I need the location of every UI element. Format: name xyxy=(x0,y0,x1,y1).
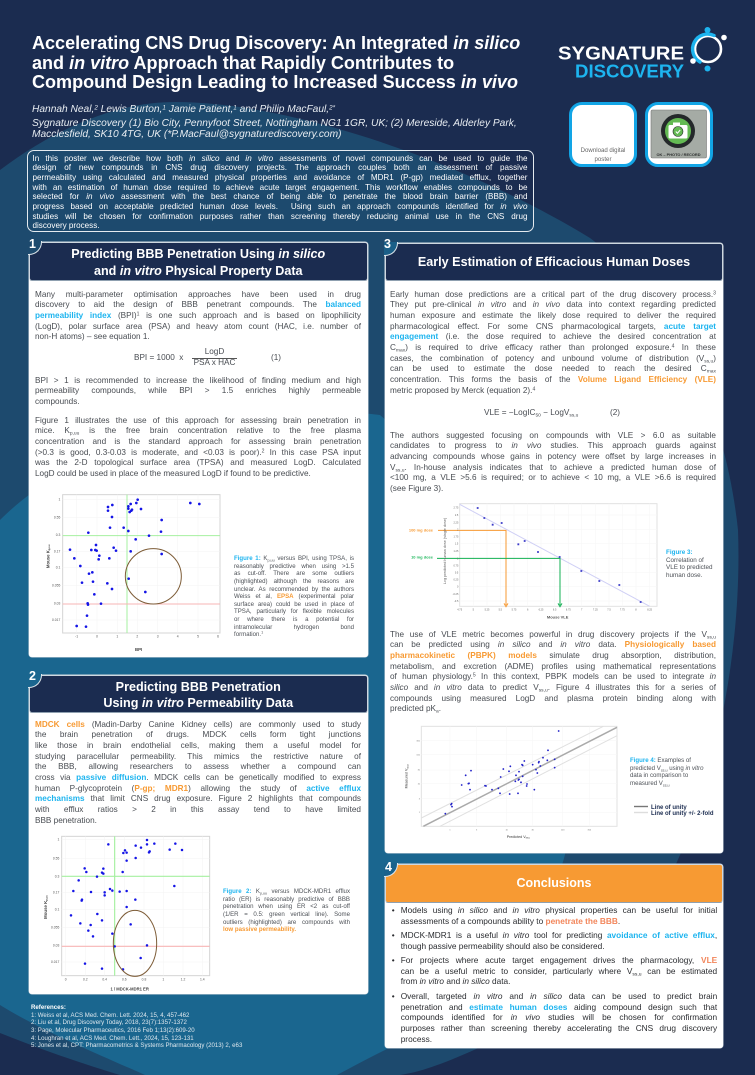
references: 4: Loughran et al, ACS Med. Chem. Lett., 2024, 15, 123-131 xyxy=(31,1035,194,1042)
chart: Figure 3 VLE correlation: 0.75 xyxy=(454,564,459,567)
chart: Figure 2 scatter: 0 xyxy=(65,978,67,982)
text: early human dose predictions: Cmax) is required to drive efficacy rather than prolonged exposure.4 In these xyxy=(390,343,716,353)
chart: Figure 2 scatter: 0.055 xyxy=(51,926,59,930)
chart: Figure 2 scatter: 0.017 xyxy=(51,960,59,964)
text: BPI introduction: non-H atoms) – see equation 1. xyxy=(35,332,150,341)
heading 1: and in vitro Physical Property Data xyxy=(94,264,303,278)
references xyxy=(31,1004,242,1049)
legend: lines of unity: Line of unity xyxy=(651,805,687,811)
abstract box: selected for in vivo assessment with the best chance of being able to penetrate the blood brain barrier (BBB) and xyxy=(32,192,528,201)
chart: Figure 3 VLE correlation: 0.25 xyxy=(454,579,459,582)
abstract box: with an estimation of human dose required to achieve acute target engagement. This workflow enables compounds to be xyxy=(32,183,528,192)
text: MDCK cells: cross via passive diffusion. MDCK cells can be genetically modified to express xyxy=(35,773,361,782)
chart: Figure 3 VLE correlation: 0 xyxy=(457,586,459,589)
text: Figure 1 explanation: concentration and is the standard approach for assessing brain penetration xyxy=(35,437,361,446)
caption: Figure 3: Figure 3: xyxy=(666,549,693,556)
chart: Figure 3 VLE correlation: 8 xyxy=(636,608,638,611)
equation 2: (2) xyxy=(610,408,620,417)
caption: Figure 2: ratio (ER) is reasonably predictive of BBB xyxy=(223,896,350,903)
abstract box: progress based on acceptable predicted human dose levels. Using such an approach compounds identified for in vivo xyxy=(32,202,527,211)
button: download digital poster: Download digital xyxy=(581,147,625,154)
chart: Figure 3 VLE correlation: 6.75 xyxy=(566,608,572,611)
text: early human dose predictions: concentration. This forms the basis of the Volume Ligand Efficiency (VLE) xyxy=(390,375,716,384)
heading 2: Predicting BBB Penetration xyxy=(116,680,281,694)
section tab 4 xyxy=(384,863,398,877)
references: References: xyxy=(31,1004,66,1011)
logo: Sygnature Discovery: SYGNATURE xyxy=(558,44,684,64)
text: early human dose predictions: Early human dose predictions are a critical part of the drug discovery process.3 xyxy=(390,290,716,299)
section number 2: 2 xyxy=(29,668,36,682)
chart: Figure 4 predicted vs measured: ss,u xyxy=(526,838,531,840)
text: early human dose predictions: pharmacological effect. For some CNS pharmacological targets, acute target xyxy=(390,322,716,331)
caption: Figure 4: measured Vss,u xyxy=(630,780,670,787)
text: Figure 1 explanation: (>0.3 is good, 0.3-0.03 is moderate, and <0.03 is poor).2 In this case PSA input xyxy=(35,448,361,457)
conclusion 3: can be a useful metric to consider, particularly where Vss,u can be estimated xyxy=(401,966,717,977)
heading 2 xyxy=(29,675,368,713)
chart: Figure 3 VLE correlation: 1.25 xyxy=(454,550,459,553)
text: VLE prediction and PBPK: silico and in vitro data to predict Vss,u. Figure 4 illustrates this for a series of xyxy=(390,683,716,693)
text: BPI thresholds xyxy=(35,376,361,406)
chart: Figure 2 scatter: 0.3 xyxy=(55,875,59,879)
conclusion 2: though passive permeability should also be considered. xyxy=(401,941,605,951)
panel 2: BBB permeability data xyxy=(29,675,368,994)
equation 1: PSA x HAC xyxy=(194,358,235,367)
chart: Figure 1 scatter: 1 xyxy=(117,634,119,638)
caption: Figure 1: as cut-off. There are some outliers xyxy=(234,570,354,577)
text: early human dose predictions: cases, the combination of potency and unbound volume of distribution (Vss,u) xyxy=(390,354,716,364)
references: 5: Jones et al, CPT: Pharmacometrics & Systems Pharmacology (2013) 2, e63 xyxy=(31,1042,242,1049)
chart: Figure 1 scatter: 0.17 xyxy=(54,549,61,553)
caption: Figure 3: Correlation of xyxy=(666,557,704,564)
chart: Figure 2 scatter: 1 / MDCK-MDR1 ER xyxy=(110,987,149,992)
conclusion 4: process. xyxy=(401,1034,432,1044)
text: VLE suitability: (see Figure 3). xyxy=(390,484,443,493)
title xyxy=(32,33,520,92)
chart: Figure 3 VLE correlation: -0.25 xyxy=(453,593,459,596)
chart: Figure 3 VLE correlation: 7 xyxy=(581,608,583,611)
affiliations: Macclesfield, SK10 4TG, UK (*P.MacFaul@sygnaturediscovery.com) xyxy=(32,129,341,140)
references: 3: Page, Molecular Pharmaceutics, 2016 Feb 1;13(2):609-20 xyxy=(31,1027,195,1034)
chart: Figure 2 scatter: 1 xyxy=(162,978,164,982)
title: Accelerating CNS Drug Discovery: An Integrated in silico xyxy=(32,33,520,53)
abstract box xyxy=(26,150,534,232)
equation 1: (1) xyxy=(271,353,281,362)
chart: Figure 4 predicted vs measured: 300 xyxy=(588,830,592,832)
text: MDCK cells: the BBB, allowing researchers to assess whether a compound can xyxy=(35,762,361,771)
text: VLE prediction and PBPK: The use of VLE metric becomes powerful in drug discovery projects if the Vss,u xyxy=(390,630,716,640)
legend: lines of unity: Line of unity +/- 2-fold xyxy=(651,811,714,817)
chart: Figure 1 scatter: 0 xyxy=(96,634,98,638)
chart: Figure 2 scatter: Mouse K xyxy=(43,901,48,919)
text: BPI thresholds: BPI > 1 is recommended to increase the likelihood of finding medium and high xyxy=(35,376,361,385)
chart: Figure 1 scatter: 1 xyxy=(59,497,61,501)
chart: Figure 3 VLE correlation: -0.5 xyxy=(454,600,459,603)
chart: Figure 1 scatter: 3 xyxy=(157,634,159,638)
caption: Figure 1 xyxy=(234,555,354,638)
abstract box: design of new compounds in CNS drug discovery projects. The approach couples both an assessment of passive xyxy=(32,163,528,172)
conclusion 1: assessments of a compounds ability to penetrate the BBB. xyxy=(401,916,620,926)
button: download digital poster: poster xyxy=(595,156,611,163)
logo: Sygnature Discovery xyxy=(558,27,727,82)
chart: Figure 3 VLE correlation: 6 xyxy=(527,608,529,611)
chart: Figure 3 VLE correlation: 4.75 xyxy=(458,608,463,611)
chart: Figure 4 predicted vs measured: 3 xyxy=(419,799,421,801)
chart: Figure 3 VLE correlation: 5 xyxy=(473,608,475,611)
chart: Figure 2 scatter: 1.2 xyxy=(181,978,185,982)
text: Figure 1 explanation: Figure 1 illustrates the use of this approach for assessing brain penetration in xyxy=(35,416,361,425)
conclusion 4 xyxy=(392,991,718,1044)
panel 4: conclusions xyxy=(385,864,723,1048)
chart: Figure 3 VLE correlation: 5.25 xyxy=(485,608,490,611)
text: early human dose predictions: engagement (i.e. the dose required to achieve the desired concentration at xyxy=(390,332,716,341)
equation 2: VLE = −LogIC50 − LogVss,u xyxy=(484,408,578,418)
section number 1: 1 xyxy=(29,237,36,251)
chart: Figure 1 scatter: 6 xyxy=(217,634,219,638)
caption: Figure 2 xyxy=(223,888,350,933)
text: VLE suitability: Vss,u. In-house analysis indicates that to achieve a predicted human dose of xyxy=(390,463,716,473)
text: early human dose predictions: They put pre-clinical in vitro and in vivo data into context regarding predicted xyxy=(390,300,716,309)
text: MDCK cells: the brain penetration of drugs. MDCK cells form tight junctions xyxy=(35,730,361,739)
caption: Figure 4: predicted Vss,u using in vitro xyxy=(630,765,703,772)
chart: Figure 3 VLE correlation: 8.25 xyxy=(648,608,653,611)
chart: Figure 3 VLE correlation: 100 mg dose xyxy=(409,528,434,533)
abstract box: In this poster we describe how both in silico and in vitro assessments of novel compounds can be used to guide the xyxy=(32,154,528,162)
chart: Figure 4 predicted vs measured: 100 xyxy=(561,830,565,832)
heading 4 xyxy=(385,864,723,903)
text: early human dose predictions xyxy=(390,290,716,394)
caption: Figure 1: or where there is a potential for xyxy=(234,616,354,623)
caption: Figure 1: Figure 1: Kp,uu versus BPI, using TPSA, is xyxy=(234,555,354,562)
affiliations: Sygnature Discovery (1) Bio City, Pennyfoot Street, Nottingham NG1 1GR, UK; (2) Mereside, Alderley Park, xyxy=(32,118,517,129)
panel 4: conclusions: • xyxy=(392,930,395,940)
text: VLE suitability xyxy=(390,431,716,493)
chart: Figure 1 scatter: 4 xyxy=(177,634,179,638)
chart: Figure 2 scatter: 0.55 xyxy=(53,857,59,861)
heading 3: Early Estimation of Efficacious Human Doses xyxy=(418,255,690,269)
chart: Figure 1 scatter: 0.55 xyxy=(54,515,61,519)
heading 1: Predicting BBB Penetration Using in silico xyxy=(71,247,325,261)
chart: Figure 2 scatter: 0.2 xyxy=(83,978,88,982)
chart: Figure 3 VLE correlation: 5.75 xyxy=(512,608,517,611)
text: VLE prediction and PBPK: metabolism, and excretion (ADME) profiles using mathematical representations xyxy=(390,662,716,671)
caption: Figure 3: VLE to predicted xyxy=(666,564,713,571)
chart: Figure 3 VLE correlation: 5.5 xyxy=(499,608,503,611)
text: early human dose predictions: metric proposed by Merck (equation 2).4 xyxy=(390,386,535,394)
conclusion 4: compounds identified for in vivo studies will be chosen for confirmation xyxy=(401,1012,717,1022)
caption: Figure 4: Figure 4: Examples of xyxy=(630,757,691,764)
title: Compound Design Leading to Increased Success in vivo xyxy=(32,72,518,92)
chart: Figure 4 predicted vs measured: Predicted V xyxy=(507,835,526,839)
chart: Figure 1 scatter: 0.017 xyxy=(52,618,61,622)
chart: Figure 4 predicted vs measured: 1 xyxy=(449,830,451,832)
text: early human dose predictions: can be used to estimate the dose needed to reach the desired Cmax xyxy=(390,364,716,375)
chart: Figure 1 scatter: 2 xyxy=(137,634,139,638)
chart: Figure 4 predicted vs measured: 100 xyxy=(416,755,421,757)
button: photo / record permitted xyxy=(645,102,713,167)
text: BPI introduction xyxy=(35,290,362,341)
abstract box: studies will be chosen for confirmation purposes rather than screening thereby reducing animal use in the CNS drug xyxy=(32,212,528,221)
chart: Figure 4 predicted vs measured: 1 xyxy=(419,812,421,814)
chart: Figure 3 VLE correlation: Mouse VLE xyxy=(547,615,569,620)
text: Figure 1 explanation xyxy=(35,416,362,478)
conclusion 1: Models using in silico and in vitro physical properties can be useful for initial xyxy=(401,905,717,915)
chart: Figure 3 VLE correlation: 1.5 xyxy=(455,543,459,546)
text: Figure 1 explanation: mice. Kp,uu is the free brain concentration relative to the free plasma xyxy=(35,426,361,437)
text: Figure 1 explanation: was the 2-D topological surface area (TPSA) and measured LogD. Calculated xyxy=(35,458,361,467)
chart: Figure 3 VLE correlation: 2 xyxy=(457,528,459,531)
affiliations xyxy=(32,118,517,140)
button: photo / record permitted: OK – PHOTO / RECORD xyxy=(656,152,701,157)
text: VLE suitability: candidates to progress to in vivo studies. This approach guards against xyxy=(390,441,716,450)
text: MDCK cells: mechanisms that limit CNS drug exposure. Figure 2 highlights that compounds xyxy=(35,794,361,803)
caption: Figure 1: Weiss et al, EPSA (experimental polar xyxy=(234,593,354,600)
text: VLE prediction and PBPK: compounds using measured LogD and plasma protein binding along with xyxy=(390,694,716,703)
equation 1 xyxy=(134,347,281,367)
panel 3: human doses xyxy=(385,243,723,853)
chart: Figure 3 VLE correlation: 1.75 xyxy=(454,536,459,539)
text: BPI introduction: (LogD), polar surface area (PSA) and heavy atom count (HAC, i.e. number of xyxy=(35,322,361,331)
chart: Figure 4 predicted vs measured xyxy=(405,726,618,840)
chart: Figure 4 predicted vs measured: 3 xyxy=(476,830,478,832)
equation 1: LogD xyxy=(205,347,224,356)
chart: Figure 3 VLE correlation: 10 mg dose xyxy=(411,554,434,559)
logo: Sygnature Discovery: DISCOVERY xyxy=(575,62,684,82)
caption: Figure 2: low passive permeability. xyxy=(223,926,296,933)
caption: Figure 2: Figure 2: Kp,uu versus MDCK-MDR1 efflux xyxy=(223,888,350,896)
chart: Figure 2 scatter: p,uu xyxy=(46,895,49,901)
chart: Figure 1 scatter: 0.055 xyxy=(52,583,61,587)
caption: Figure 1: TPSA, particularly for flexible molecules xyxy=(234,608,354,615)
chart: Figure 3 VLE correlation: 2.75 xyxy=(454,507,459,510)
text: early human dose predictions: human exposure and estimate the likely dose required to deliver the required xyxy=(390,311,716,320)
caption: Figure 1: formation.1 xyxy=(234,631,263,638)
panel 1: BBB physical property data xyxy=(29,242,368,657)
heading 1 xyxy=(29,242,368,281)
chart: Figure 4 predicted vs measured: 10 xyxy=(505,830,509,832)
panel 4: conclusions: • xyxy=(392,905,395,915)
caption: Figure 4 xyxy=(630,757,704,787)
chart: Figure 2 scatter xyxy=(43,836,210,992)
chart: Figure 4 predicted vs measured: 300 xyxy=(416,741,421,743)
caption: Figure 2: (1/ER = 0.5: green vertical line). Some xyxy=(223,911,350,918)
chart: Figure 3 VLE correlation: 0.5 xyxy=(455,571,459,574)
text: Figure 1 explanation: LogD could be used in place of the measured LogD if found to be predictive. xyxy=(35,469,311,478)
text: MDCK cells: MDCK cells (Madin-Darby Canine Kidney cells) are commonly used to study xyxy=(35,720,361,729)
chart: Figure 4 predicted vs measured: 30 xyxy=(531,830,535,832)
caption: Figure 4: data in comparison to xyxy=(630,772,688,779)
abstract box: permeability using calculated and measured physical properties and avoidance of MDR1 (P-gp) mediated efflux, together xyxy=(32,173,528,182)
chart: Figure 3 VLE correlation: 2.5 xyxy=(455,514,459,517)
chart: Figure 1 scatter: p,uu xyxy=(48,544,51,550)
heading 2: Using in vitro Permeability Data xyxy=(103,696,293,710)
chart: Figure 3 VLE correlation: 1 xyxy=(457,557,459,560)
text: MDCK cells: BBB penetration. xyxy=(35,816,97,824)
chart: Figure 1 scatter: BPI xyxy=(135,647,143,652)
chart: Figure 3 VLE correlation: 6.5 xyxy=(553,608,557,611)
chart: Figure 3 VLE correlation xyxy=(409,503,658,620)
text: VLE suitability: advancing compounds whose gains in potency were offset by large increases in xyxy=(390,452,716,461)
caption: Figure 1: reasonably predictive when using >1.5 xyxy=(234,563,354,570)
chart: Figure 1 scatter: Mouse K xyxy=(46,550,51,568)
panel 4: conclusions: • xyxy=(392,955,395,965)
chart: Figure 1 scatter: 0.3 xyxy=(56,533,61,537)
caption: Figure 3 xyxy=(666,549,713,579)
text: VLE suitability: <100 mg, a VLE >5.6 is required; or to achieve < 10 mg, a VLE >6.6 is required xyxy=(390,473,716,482)
text: MDCK cells xyxy=(35,720,362,824)
chart: Figure 2 scatter: 0.1 xyxy=(55,908,59,912)
chart: Figure 2 scatter: 0.8 xyxy=(142,978,146,982)
chart: Figure 2 scatter: 0.17 xyxy=(53,891,59,895)
conclusion 2 xyxy=(392,930,717,951)
chart: Figure 2 scatter: 0.6 xyxy=(122,978,127,982)
button: download digital poster xyxy=(569,102,637,167)
chart: Figure 1 scatter: -1 xyxy=(76,634,79,638)
text: VLE suitability: The authors suggested focusing on compounds with VLE > 6.0 as suitable xyxy=(390,431,716,440)
caption: Figure 1: (highlighted) although the reasons are xyxy=(234,578,354,585)
references: 1: Weiss et al, ACS Med. Chem. Lett. 2024, 15, 4, 457-462 xyxy=(31,1012,189,1019)
caption: Figure 2: outliers (highlighted) are compounds with xyxy=(223,919,350,926)
equation 1: BPI = 1000 x xyxy=(134,353,183,362)
conclusion 4: penetration and estimate human doses aiding compound design such that xyxy=(401,1002,717,1012)
chart: Figure 1 scatter xyxy=(46,494,220,652)
title: and in vitro Approach that Rapidly Contributes to xyxy=(32,52,454,72)
conclusion 3: from in vitro and in silico data. xyxy=(401,976,510,986)
text: BPI thresholds: compounds. xyxy=(35,397,80,406)
chart: Figure 3 VLE correlation: 6.25 xyxy=(539,608,544,611)
text: BPI thresholds: permeability compounds, while BPI > 1.5 enriches highly permeable xyxy=(35,386,361,395)
text: VLE prediction and PBPK xyxy=(390,630,716,715)
text: BPI introduction: discovery to aid the design of BBB penetrant compounds. The balanced xyxy=(35,300,361,309)
text: VLE prediction and PBPK: predicted pKa. xyxy=(390,704,441,715)
text: VLE prediction and PBPK: pharmacokinetic (PBPK) models simulate drug absorption, distribution, xyxy=(390,651,716,660)
conclusion 4: purposes rather than screening thereby accelerating the CNS drug discovery xyxy=(401,1023,717,1033)
section number 3: 3 xyxy=(384,236,391,250)
chart: Figure 4 predicted vs measured: Measured V xyxy=(405,769,409,789)
conclusion 4: Overall, targeted in vitro and in silico data can be used to predict brain xyxy=(401,991,717,1001)
caption: Figure 3: human dose. xyxy=(666,572,702,579)
chart: Figure 1 scatter: 0.03 xyxy=(54,601,61,605)
caption: Figure 2: penetration when using ER <2 as cut-off xyxy=(223,903,350,910)
text: BPI introduction: permeability index (BPI)1 is one such approach and is based on lipophilicity xyxy=(35,311,361,320)
heading 4: Conclusions xyxy=(516,876,592,890)
chart: Figure 3 VLE correlation: 7.5 xyxy=(608,608,612,611)
abstract box: discovery process. xyxy=(32,221,100,230)
chart: Figure 3 VLE correlation: 2.25 xyxy=(454,521,459,524)
text: MDCK cells: like those in brain endothelial cells, making them a useful model for xyxy=(35,741,361,750)
section number 4: 4 xyxy=(385,860,392,874)
section tab 2 xyxy=(28,674,42,688)
chart: Figure 1 scatter: 0.1 xyxy=(56,565,61,569)
text: BPI introduction: Many multi-parameter optimisation approaches have been used in drug xyxy=(35,290,361,299)
chart: Figure 2 scatter: 1 xyxy=(57,838,59,842)
section tab 1 xyxy=(28,241,42,255)
legend: lines of unity xyxy=(634,804,714,817)
caption: Figure 1: surface area) could be used in place of xyxy=(234,601,354,608)
chart: Figure 3 VLE correlation: Log predicted human dose (single dose) xyxy=(443,518,447,584)
text: MDCK cells: human P-glycoprotein (P-gp; MDR1) allowing the study of active efflux xyxy=(35,784,361,793)
chart: Figure 1 scatter: 5 xyxy=(197,634,199,638)
caption: Figure 1: unclear. As recommended by the authors xyxy=(234,586,354,593)
chart: Figure 2 scatter: 0.4 xyxy=(102,978,107,982)
text: VLE prediction and PBPK: of human physiology.5 In this context, PBPK models can be used to integrate in xyxy=(390,672,716,681)
chart: Figure 2 scatter: 0.03 xyxy=(53,944,59,948)
heading 3 xyxy=(385,243,723,281)
conclusion 3: For projects where acute target engagement drives the pharmacology, VLE xyxy=(401,955,717,965)
text: MDCK cells: with efflux ratios > 2 in this assay tend to have limited xyxy=(35,805,361,814)
chart: Figure 4 predicted vs measured: 10 xyxy=(418,784,421,786)
text: MDCK cells: studying paracellular permeability. This mimics the restrictive nature of xyxy=(35,752,361,761)
caption: Figure 1: intramolecular hydrogen bond xyxy=(234,624,354,631)
text: VLE prediction and PBPK: can be predicted using in silico and in vitro data. Physiologically based xyxy=(390,640,716,649)
chart: Figure 3 VLE correlation: 7.75 xyxy=(620,608,626,611)
chart: Figure 3 VLE correlation: 7.25 xyxy=(593,608,599,611)
authors: Hannah Neal,2 Lewis Burton,1 Jamie Patient,1 and Philip MacFaul,2* xyxy=(32,104,335,115)
panel 4: conclusions: • xyxy=(392,991,395,1001)
conclusion 2: MDCK-MDR1 is a useful in vitro tool for predicting avoidance of active efflux, xyxy=(401,930,717,940)
chart: Figure 4 predicted vs measured: ss,u xyxy=(407,764,409,769)
equation 2 xyxy=(484,408,620,418)
section tab 3 xyxy=(384,242,398,256)
references: 2: Liu et al, Drug Discovery Today, 2018, 23(7):1357-1372 xyxy=(31,1019,187,1026)
conclusion 3 xyxy=(392,955,717,986)
chart: Figure 2 scatter: 1.4 xyxy=(200,978,205,982)
chart: Figure 4 predicted vs measured: 30 xyxy=(418,770,421,772)
conclusion 1 xyxy=(392,905,717,926)
